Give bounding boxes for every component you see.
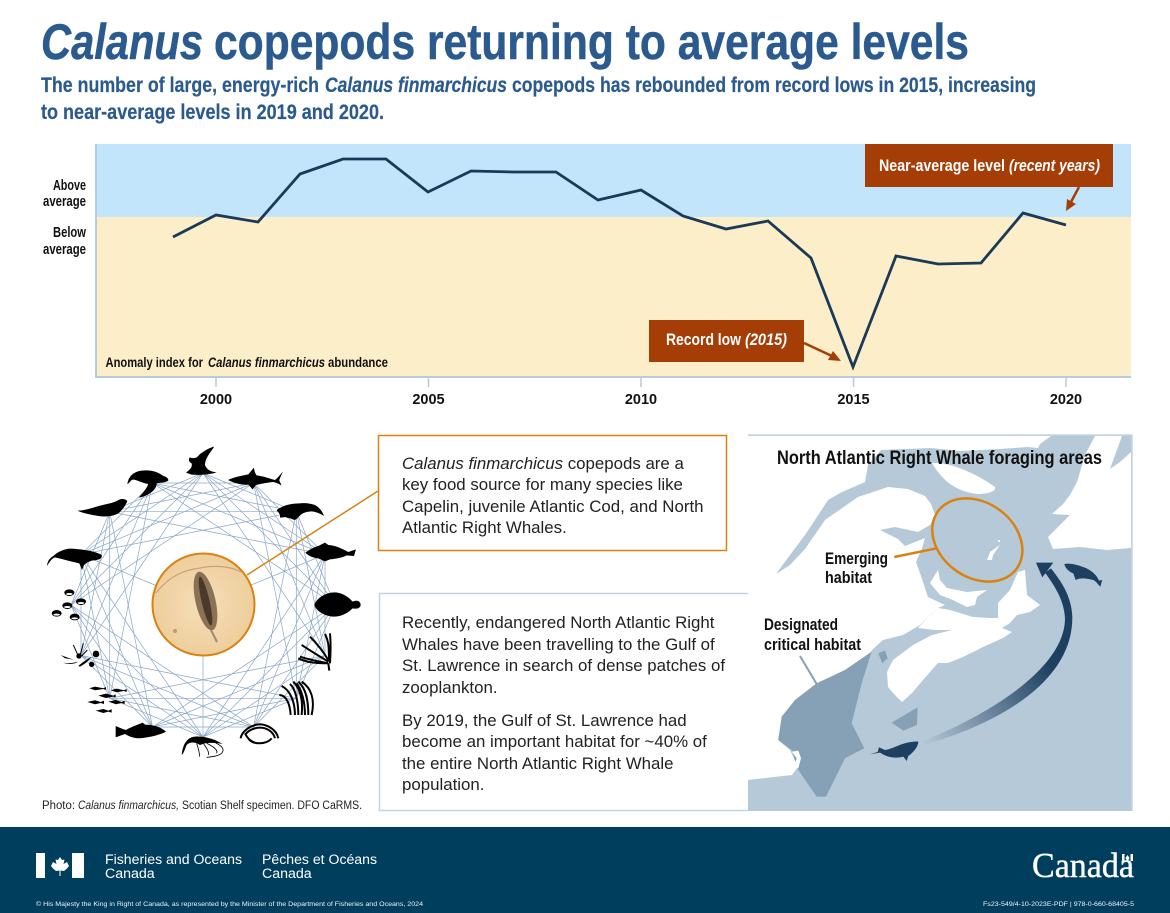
icon: sea turtle xyxy=(127,470,168,498)
icon: seagrass xyxy=(279,682,313,715)
map land: Anticosti Island xyxy=(932,463,995,494)
icon: whale north xyxy=(1064,564,1102,587)
icon: right whale xyxy=(47,549,102,570)
department name: English: Canada xyxy=(105,866,155,882)
department name: French xyxy=(262,852,377,882)
map land: Quebec, New Brunswick, New England xyxy=(748,436,1051,780)
chart band: below average xyxy=(96,217,1131,377)
subtitle: The number of large, energy-rich xyxy=(41,74,319,97)
emerging habitat leader xyxy=(894,548,937,557)
text box: right whale habitat: become an important habitat for ~40% of xyxy=(402,732,707,751)
text box: right whale habitat: population. xyxy=(402,775,484,794)
callout: record low xyxy=(649,320,841,362)
y-axis labels: Above xyxy=(53,178,86,194)
label: emerging habitat xyxy=(825,549,888,587)
chart band: above average xyxy=(96,144,1131,217)
callout: record low: Record low xyxy=(666,331,741,349)
department name: English xyxy=(105,852,242,882)
footer xyxy=(0,827,1170,913)
text box: right whale habitat: zooplankton. xyxy=(402,678,498,697)
icon: small fish school xyxy=(87,687,127,713)
icon: Canadian flag signature xyxy=(36,853,84,878)
icon: cod xyxy=(305,543,356,561)
label: designated critical habitat: critical habitat xyxy=(764,635,861,654)
text box: key food source: Capelin, juvenile Atlantic Cod, and North xyxy=(402,497,704,516)
photo credit: Calanus finmarchicus, xyxy=(78,800,179,812)
photo credit: Scotian Shelf specimen. DFO CaRMS. xyxy=(182,800,362,812)
icon: salmon xyxy=(116,723,166,738)
label: emerging habitat: Emerging xyxy=(825,549,888,568)
icon: seal xyxy=(77,499,127,517)
x-axis years: 2005 xyxy=(412,392,445,408)
text box: key food source xyxy=(378,436,726,550)
chart axis caption xyxy=(106,355,388,370)
text box: right whale habitat: By 2019, the Gulf of St. Lawrence had xyxy=(402,711,687,730)
title: Calanus xyxy=(41,14,203,70)
label: designated critical habitat xyxy=(764,615,861,654)
photo credit xyxy=(42,800,362,812)
label: designated critical habitat: Designated xyxy=(764,615,838,634)
photo credit: Photo: xyxy=(42,800,75,812)
y-axis labels: average xyxy=(43,194,86,210)
text box: right whale habitat: St. Lawrence in search of dense patches of xyxy=(402,656,725,675)
publication number: Fs23-549/4-10-2023E-PDF | 978-0-660-68405-5 xyxy=(983,901,1134,908)
icon: flounder xyxy=(314,592,361,617)
department name: French: Canada xyxy=(262,866,312,882)
critical habitat leader xyxy=(800,656,817,684)
chart axis caption: Anomaly index for xyxy=(106,355,204,370)
icon: seabird xyxy=(186,447,217,475)
migration arrow xyxy=(922,563,1072,745)
line chart: anomaly index xyxy=(43,144,1131,408)
text box: key food source: Calanus finmarchicus copepods are a xyxy=(402,454,684,473)
icon: kelp xyxy=(298,633,331,671)
emerging habitat ellipse xyxy=(916,481,1039,599)
x-axis years: 2015 xyxy=(837,392,870,408)
designated critical habitat areas xyxy=(778,651,918,797)
orange leader line xyxy=(247,491,378,575)
callout: near-average level xyxy=(865,144,1113,211)
icon: crab xyxy=(241,724,278,743)
department name: English: Fisheries and Oceans xyxy=(105,852,242,868)
text box: key food source: Atlantic Right Whales. xyxy=(402,518,567,537)
copyright: © His Majesty the King in Right of Canada, as represented by the Minister of the Department of Fisheries and Oceans, 2024 xyxy=(36,900,423,908)
map land: Cape Cod xyxy=(792,751,801,768)
callout: near-average level: Near-average level xyxy=(879,157,1005,175)
web connections xyxy=(71,473,335,737)
map land: Magdalen Islands xyxy=(987,540,1000,560)
subtitle: Calanus finmarchicus xyxy=(325,74,507,97)
title: copepods returning to average levels xyxy=(214,14,969,70)
species silhouettes xyxy=(47,447,361,757)
subtitle: to near-average levels in 2019 and 2020. xyxy=(41,101,384,124)
icon: shrimp xyxy=(182,737,223,757)
subtitle xyxy=(41,74,1036,124)
label: emerging habitat: habitat xyxy=(825,568,872,587)
subtitle: copepods has rebounded from record lows in 2015, increasing xyxy=(512,74,1036,97)
icon: whale south xyxy=(870,742,918,761)
icon: shark xyxy=(228,468,283,489)
photo: copepod specimen xyxy=(152,554,254,656)
chart axis caption: Calanus finmarchicus xyxy=(208,355,325,370)
map: foraging areas xyxy=(748,435,1132,811)
map land: Prince Edward Island xyxy=(930,570,987,607)
y-axis labels xyxy=(43,178,87,258)
icon: zooplankton xyxy=(61,643,99,667)
chart axis caption: abundance xyxy=(328,355,388,370)
map land: Newfoundland xyxy=(1048,436,1131,550)
icon: clams xyxy=(52,589,86,620)
y-axis labels: Below xyxy=(53,225,87,241)
x-axis years: 2020 xyxy=(1050,392,1082,408)
x-axis years: 2010 xyxy=(625,392,657,408)
department name: French: Pêches et Océans xyxy=(262,852,377,868)
map title: North Atlantic Right Whale foraging areas xyxy=(777,448,1102,469)
text box: right whale habitat: Whales have been travelling to the Gulf of xyxy=(402,635,715,654)
text box: right whale habitat xyxy=(380,594,748,810)
data line xyxy=(173,159,1066,367)
x-axis years: 2000 xyxy=(200,392,232,408)
food web diagram xyxy=(42,447,378,812)
icon: lobster xyxy=(277,503,324,520)
y-axis labels: average xyxy=(43,242,86,258)
x-axis years xyxy=(200,392,1082,408)
map land: Nova Scotia xyxy=(887,570,1040,702)
callout: near-average level: (recent years) xyxy=(1009,157,1100,175)
text box: right whale habitat: the entire North Atlantic Right Whale xyxy=(402,754,674,773)
Canada wordmark: Canada xyxy=(1032,846,1134,885)
callout: record low: (2015) xyxy=(745,331,787,349)
text box: key food source: key food source for many species like xyxy=(402,475,683,494)
text box: right whale habitat: Recently, endangered North Atlantic Right xyxy=(402,613,715,632)
